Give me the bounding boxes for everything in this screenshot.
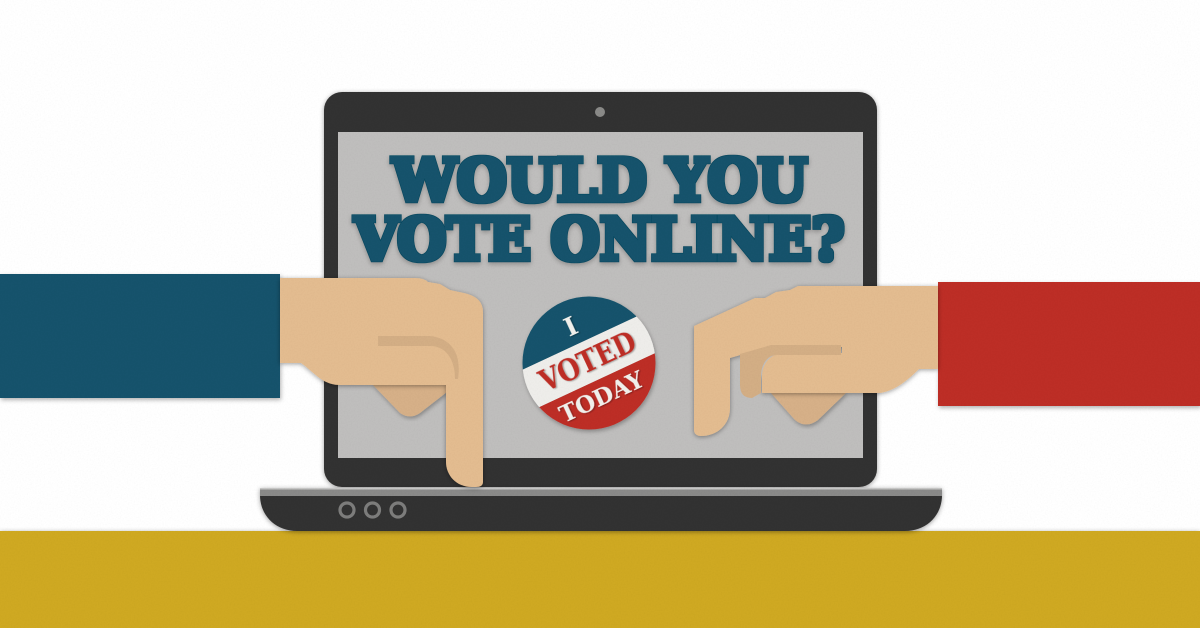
title <box>354 146 844 274</box>
left hand and finger <box>280 278 483 487</box>
screen <box>338 132 863 458</box>
badge text <box>518 292 656 431</box>
badge text: I <box>560 311 582 342</box>
title: WOULD YOU <box>392 146 808 214</box>
badge stripes <box>522 296 658 434</box>
right thumb shadow <box>740 345 841 398</box>
left thumb crease <box>378 336 459 379</box>
badge text: TODAY <box>555 366 649 429</box>
right sleeve <box>938 282 1200 406</box>
desk <box>0 531 1200 628</box>
laptop lid <box>324 92 877 487</box>
laptop base <box>260 488 942 531</box>
title: VOTE ONLINE? <box>354 206 844 274</box>
left sleeve <box>0 274 280 398</box>
left hand shaded palm <box>372 384 447 416</box>
right thumb <box>762 353 880 393</box>
right hand shaded palm <box>770 392 847 424</box>
left hand pointing down <box>280 278 483 487</box>
right hand pointing down <box>694 286 938 436</box>
laptop <box>260 92 942 531</box>
badge: I voted today <box>522 296 658 434</box>
badge text: VOTED <box>533 324 642 400</box>
right hand and finger <box>694 286 938 436</box>
webcam <box>595 107 605 117</box>
laptop buttons <box>340 503 405 517</box>
